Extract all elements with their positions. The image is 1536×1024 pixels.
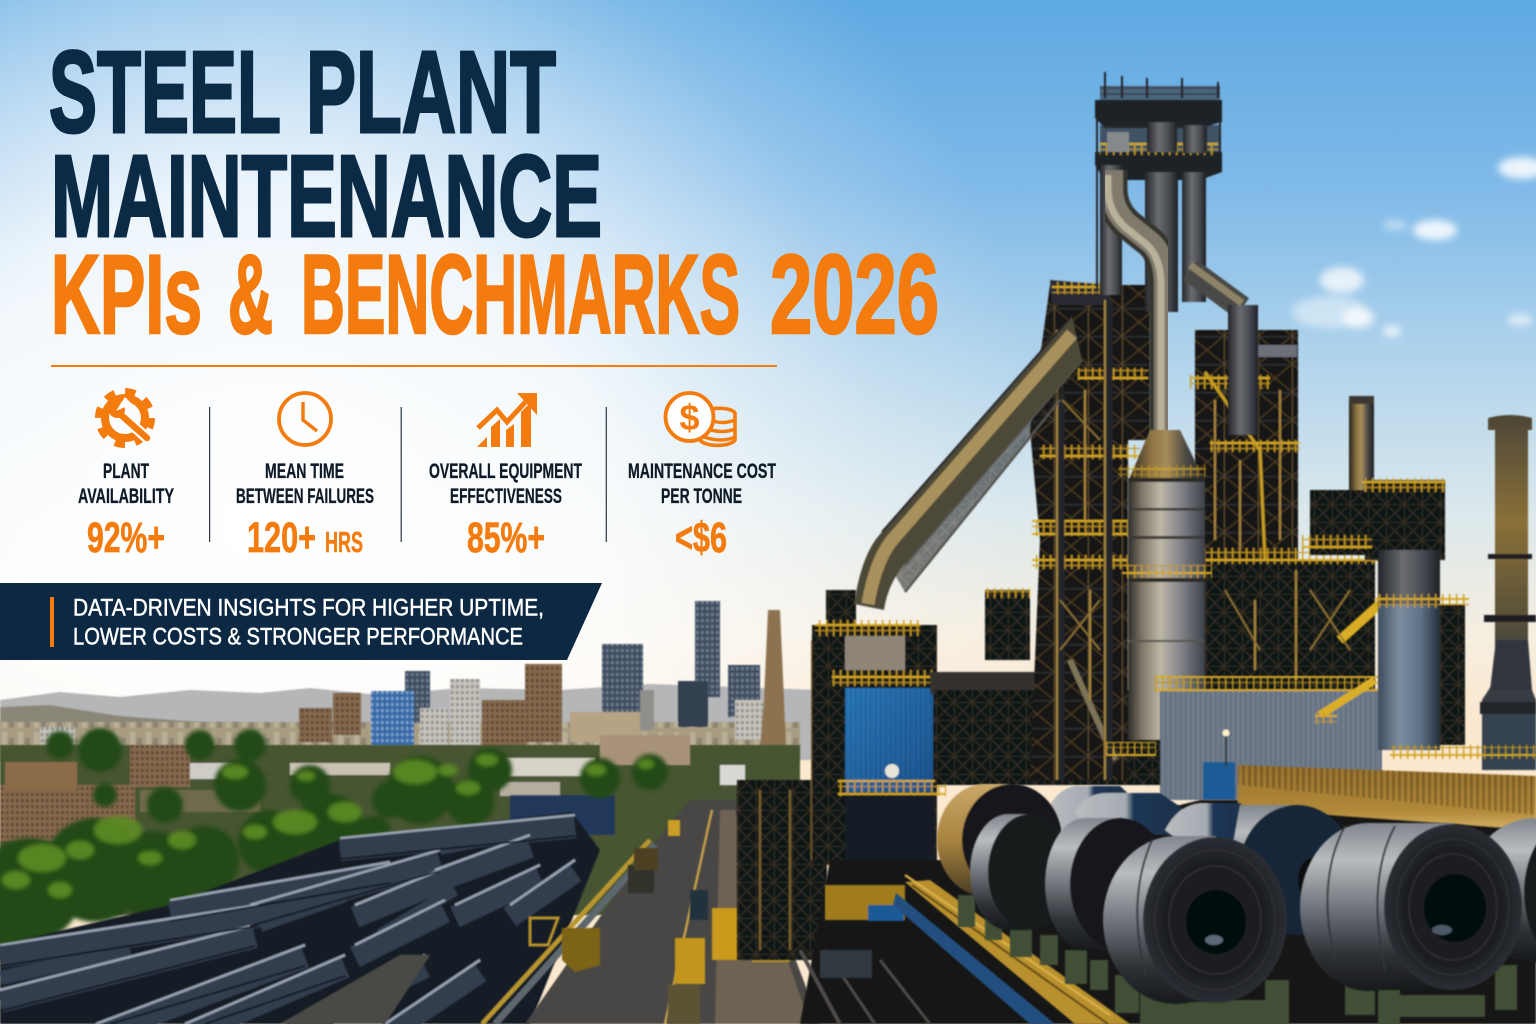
KPI: maintenance cost per tonne: PER TONNE [661, 485, 742, 508]
steel coil far right [1467, 818, 1536, 964]
steel coil left gold [937, 784, 1062, 896]
KPI: plant availability: PLANT [103, 460, 149, 483]
title: 2026 [770, 232, 939, 357]
KPI: maintenance cost per tonne: MAINTENANCE COST [628, 460, 776, 483]
title [49, 27, 939, 357]
KPI: plant availability [78, 392, 174, 562]
icon: coins: $ [679, 397, 700, 438]
clouds [1292, 157, 1536, 336]
icon: rising chart [477, 393, 537, 447]
main frame structure [1030, 280, 1390, 780]
walkway [893, 875, 1130, 1024]
KPI: mean time between failures: HRS [325, 527, 363, 559]
inclined conveyor [854, 316, 1082, 610]
right cylinders and towers [1302, 396, 1469, 750]
icon: coins [666, 393, 735, 445]
orange rule [51, 365, 777, 367]
road and yard [482, 800, 820, 1024]
steel coil second [970, 814, 1072, 930]
far chimney [760, 610, 786, 750]
KPI: mean time between failures [236, 393, 374, 562]
title: KPIs [51, 232, 202, 357]
furnace body [1118, 430, 1212, 740]
title: & [228, 232, 273, 357]
title: BENCHMARKS [301, 232, 740, 357]
KPI: maintenance cost per tonne [628, 393, 776, 562]
distant mountains [0, 684, 820, 760]
icon: gear and wrench [98, 392, 152, 444]
back coils [1050, 786, 1355, 935]
steel coil third [1045, 818, 1170, 950]
banner: DATA-DRIVEN INSIGHTS FOR HIGHER UPTIME, [73, 594, 544, 622]
blast furnace top platforms [1095, 72, 1222, 290]
icon: clock [279, 393, 331, 445]
city skyline [0, 601, 800, 765]
steel coil front [1103, 836, 1287, 1004]
KPI: overall equipment effectiveness: 85%+ [467, 514, 545, 562]
coil yard ground [800, 742, 1536, 1024]
KPI: mean time between failures: 120+ [247, 514, 316, 562]
furnace columns [1100, 122, 1258, 435]
yard vehicles [530, 820, 790, 1024]
KPI: mean time between failures: BETWEEN FAILURES [236, 485, 374, 508]
KPI: overall equipment effectiveness: EFFECTIVENESS [450, 485, 562, 508]
title: PLANT [306, 27, 556, 157]
KPI: maintenance cost per tonne: <$6 [675, 514, 727, 562]
city ground and lower blocks [0, 735, 800, 915]
title: MAINTENANCE [51, 131, 602, 261]
left plant gantry [737, 588, 1165, 960]
right plant block and stairs [1155, 676, 1387, 800]
KPI: plant availability: AVAILABILITY [78, 485, 174, 508]
steel beam stacks [0, 812, 600, 1024]
trees [0, 728, 668, 960]
KPI: overall equipment effectiveness [429, 393, 582, 562]
steel coil right [1300, 823, 1522, 991]
KPI: plant availability: 92%+ [87, 514, 165, 562]
big downcomer pipe [1108, 170, 1165, 435]
banner [0, 583, 602, 660]
title: STEEL [49, 27, 281, 157]
coil supports [958, 895, 1517, 1024]
right chimney [1480, 415, 1536, 770]
KPI: overall equipment effectiveness: OVERALL EQUIPMENT [429, 460, 582, 483]
rail tracks [800, 885, 930, 1024]
banner: LOWER COSTS & STRONGER PERFORMANCE [73, 624, 523, 650]
KPI: mean time between failures: MEAN TIME [265, 460, 344, 483]
